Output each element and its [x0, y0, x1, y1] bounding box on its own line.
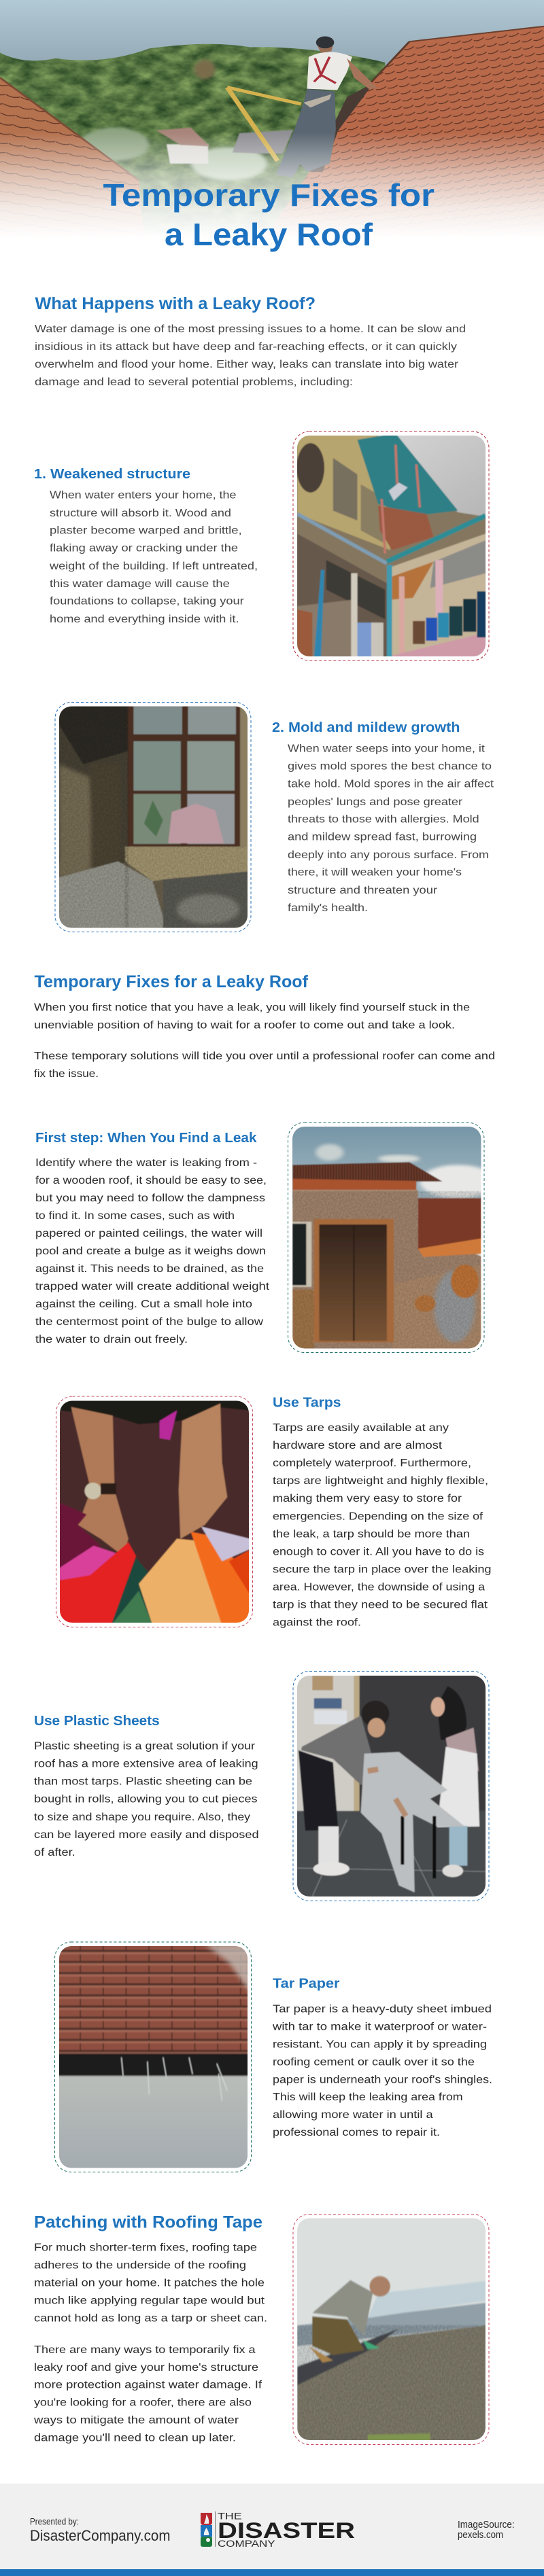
text block: there, it will weaken your home's — [288, 867, 462, 878]
intro text: Water damage is one of the most pressing issues to a home. It can be slow and — [35, 323, 466, 335]
text block: Plastic sheeting is a great solution if your — [34, 1741, 256, 1752]
panel: tar paper — [54, 1942, 492, 2172]
temporary fixes text: These temporary solutions will tide you over until a professional roofer can come and — [34, 1051, 495, 1062]
footer accent bar — [0, 2569, 544, 2576]
text block: the leak, a tarp should be more than — [273, 1529, 470, 1540]
text block: the centermost point of the bulge to allow — [35, 1316, 264, 1328]
text block: Tar paper is a heavy-duty sheet imbued — [273, 2003, 492, 2015]
text block: more protection against water damage. If — [34, 2380, 262, 2390]
icon: mold — [201, 2537, 212, 2547]
footer — [0, 2484, 544, 2576]
text block: deeply into any porous surface. From — [288, 849, 489, 861]
text block: This will keep the leaking area from — [273, 2092, 463, 2103]
icon: flame — [201, 2513, 212, 2525]
panel: first step — [35, 1123, 496, 1352]
text block: gives mold spores the best chance to — [288, 761, 492, 772]
text block: flaking away or cracking under the — [50, 542, 238, 554]
panel: use tarps — [56, 1396, 491, 1628]
title: Temporary Fixes for — [103, 177, 435, 213]
text block: completely waterproof. Furthermore, — [273, 1458, 471, 1469]
text block: allowing more water in until a — [273, 2109, 433, 2121]
text block: tarp is that they need to be secured flat — [273, 1600, 488, 1610]
photo: roofer kneeling on shingles — [296, 2217, 488, 2443]
text block: trapped water will create additional weight — [35, 1281, 270, 1292]
text block: against the ceiling. Cut a small hole into — [35, 1299, 252, 1310]
panel: mold and mildew — [55, 703, 494, 932]
presented by: DisasterCompany.com — [30, 2527, 170, 2544]
panel: weakened structure — [34, 431, 489, 660]
heading: Use Plastic Sheets — [34, 1714, 160, 1729]
roofer figure — [276, 36, 377, 177]
panel: use plastic sheets — [34, 1672, 489, 1901]
logo: The Disaster Company — [201, 2510, 355, 2549]
text block: roofing cement or caulk over it so the — [273, 2056, 475, 2068]
text block: of after. — [34, 1847, 75, 1858]
text block: paper is underneath your roof's shingles. — [273, 2074, 492, 2086]
text block: Identify where the water is leaking from - — [35, 1157, 257, 1169]
temporary fixes text — [34, 1002, 495, 1080]
heading: Patching with Roofing Tape — [34, 2212, 262, 2231]
text block: you're looking for a roofer, there are also — [34, 2397, 252, 2408]
text block: and mildew spread fast, burrowing — [288, 832, 477, 843]
text block: resistant. You can apply it by spreading — [273, 2039, 487, 2051]
temporary fixes text: When you first notice that you have a leak, you will likely find yourself stuck in the — [34, 1002, 470, 1014]
presented by — [30, 2516, 170, 2544]
image source: pexels.com — [458, 2529, 503, 2541]
image source: ImageSource: — [458, 2519, 515, 2530]
heading: Tar Paper — [273, 1976, 340, 1991]
text block: roof has a more extensive area of leaking — [34, 1759, 258, 1769]
intro text: overwhelm and flood your home. Either way, leaks can translate into big water — [35, 359, 459, 370]
text block: weight of the building. If left untreated, — [49, 561, 258, 572]
photo: rusty-roofed house with wooden door — [292, 1126, 496, 1351]
text block: with tar to make it waterproof or water- — [272, 2021, 487, 2033]
text block: area. However, the downside of using a — [273, 1582, 485, 1593]
photo: old balconied building — [295, 434, 489, 660]
dashed frame — [54, 1942, 252, 2172]
logo: The Disaster Company: DISASTER — [218, 2518, 355, 2543]
text block: but you may need to follow the dampness — [35, 1193, 265, 1204]
dashed frame — [293, 1672, 489, 1901]
text block: can be layered more easily and disposed — [34, 1829, 259, 1841]
text block — [288, 743, 494, 914]
text block — [34, 1741, 259, 1858]
text block: papered or painted ceilings, the water will — [35, 1228, 262, 1239]
photo: stained wall and window — [57, 705, 250, 929]
text block: home and everything inside with it. — [50, 614, 239, 625]
text block: There are many ways to temporarily fix a — [34, 2344, 256, 2356]
text block: foundations to collapse, taking your — [50, 595, 244, 607]
text block: to find it. In some cases, such as with — [35, 1210, 235, 1222]
text block: the water to drain out freely. — [35, 1334, 188, 1345]
text block: much like applying regular tape would but — [34, 2295, 265, 2306]
icon: water — [201, 2525, 212, 2538]
text block: to size and shape you require. Also, they — [34, 1812, 250, 1823]
photo: hands holding a colourful tarp — [59, 1400, 250, 1625]
text block: this water damage will cause the — [50, 578, 230, 590]
title: a Leaky Roof — [165, 217, 373, 252]
text block — [49, 489, 258, 625]
text block: professional comes to repair it. — [273, 2127, 440, 2138]
text block: emergencies. Depending on the size of — [273, 1511, 483, 1522]
heading: First step: When You Find a Leak — [35, 1131, 257, 1146]
hero photo: roofer on a tiled roof — [0, 0, 544, 249]
text block: tarps are lightweight and highly flexible, — [273, 1475, 488, 1487]
text block: against it. This needs to be drained, as the — [35, 1263, 264, 1275]
text block: For much shorter-term fixes, roofing tape — [34, 2242, 257, 2253]
text block: bought in rolls, allowing you to cut pieces — [34, 1794, 258, 1805]
logo: The Disaster Company: COMPANY — [218, 2538, 275, 2549]
heading: 2. Mold and mildew growth — [272, 720, 460, 735]
text block: When water seeps into your home, it — [288, 743, 485, 754]
dashed frame — [56, 1396, 253, 1627]
intro text: damage and lead to several potential problems, including: — [35, 376, 353, 388]
text block: pool and create a bulge as it weighs down — [35, 1246, 266, 1257]
temporary fixes text: unenviable position of having to wait for a roofer to come out and take a look. — [34, 1019, 455, 1031]
text block: ways to mitigate the amount of water — [33, 2415, 239, 2426]
text block — [272, 2003, 492, 2138]
text block: enough to cover it. All you have to do is — [273, 1547, 484, 1557]
heading: temporary fixes: Temporary Fixes for a Leaky Roof — [34, 972, 309, 991]
text block — [35, 1157, 270, 1345]
heading: Use Tarps — [273, 1396, 341, 1411]
text block: structure will absorb it. Wood and — [50, 508, 231, 519]
text block: against the roof. — [273, 1617, 361, 1628]
presented by: Presented by: — [30, 2516, 79, 2526]
panel: patching with roofing tape — [33, 2212, 489, 2445]
dashed frame — [293, 2214, 489, 2445]
temporary fixes text: fix the issue. — [34, 1068, 99, 1080]
text block: secure the tarp in place over the leaking — [273, 1564, 491, 1575]
text block: hardware store and are almost — [273, 1440, 443, 1451]
text block — [33, 2242, 267, 2443]
text block: damage you'll need to clean up later. — [34, 2433, 236, 2443]
text block: making them very easy to store for — [273, 1493, 462, 1504]
text block: family's health. — [288, 902, 368, 914]
dashed frame — [293, 431, 489, 660]
heading: 1. Weakened structure — [34, 467, 190, 482]
text block: cannot hold as long as a tarp or sheet can. — [34, 2313, 267, 2324]
text block: take hold. Mold spores in the air affect — [288, 779, 494, 790]
dashed frame — [288, 1123, 484, 1352]
footer background — [0, 2484, 544, 2569]
dashed frame — [55, 703, 251, 932]
photo: two people wrapping a table in plastic — [296, 1674, 488, 1899]
text block: structure and threaten your — [288, 885, 438, 896]
text block: material on your home. It patches the hole — [34, 2278, 265, 2289]
intro text — [35, 323, 466, 388]
text block: threats to those with allergies. Mold — [288, 814, 479, 825]
text block: Tarps are easily available at any — [273, 1422, 449, 1434]
logo: The Disaster Company: THE — [218, 2510, 242, 2521]
photo: wet tiled roof edge — [57, 1944, 250, 2171]
title — [103, 177, 435, 252]
text block: adheres to the underside of the roofing — [34, 2260, 246, 2271]
text block: for a wooden roof, it should be easy to see, — [35, 1175, 267, 1186]
text block — [273, 1422, 491, 1628]
text block: When water enters your home, the — [50, 489, 237, 501]
text block: than most tarps. Plastic sheeting can be — [34, 1776, 252, 1787]
intro text: insidious in its attack but have deep and far-reaching effects, or it can quickly — [35, 341, 457, 353]
text block: leaky roof and give your home's structure — [34, 2362, 258, 2374]
image source — [458, 2519, 515, 2541]
text block: plaster become warped and brittle, — [50, 525, 242, 537]
text block: peoples' lungs and pose greater — [288, 796, 463, 808]
heading: what happens: What Happens with a Leaky Roof? — [35, 294, 316, 313]
